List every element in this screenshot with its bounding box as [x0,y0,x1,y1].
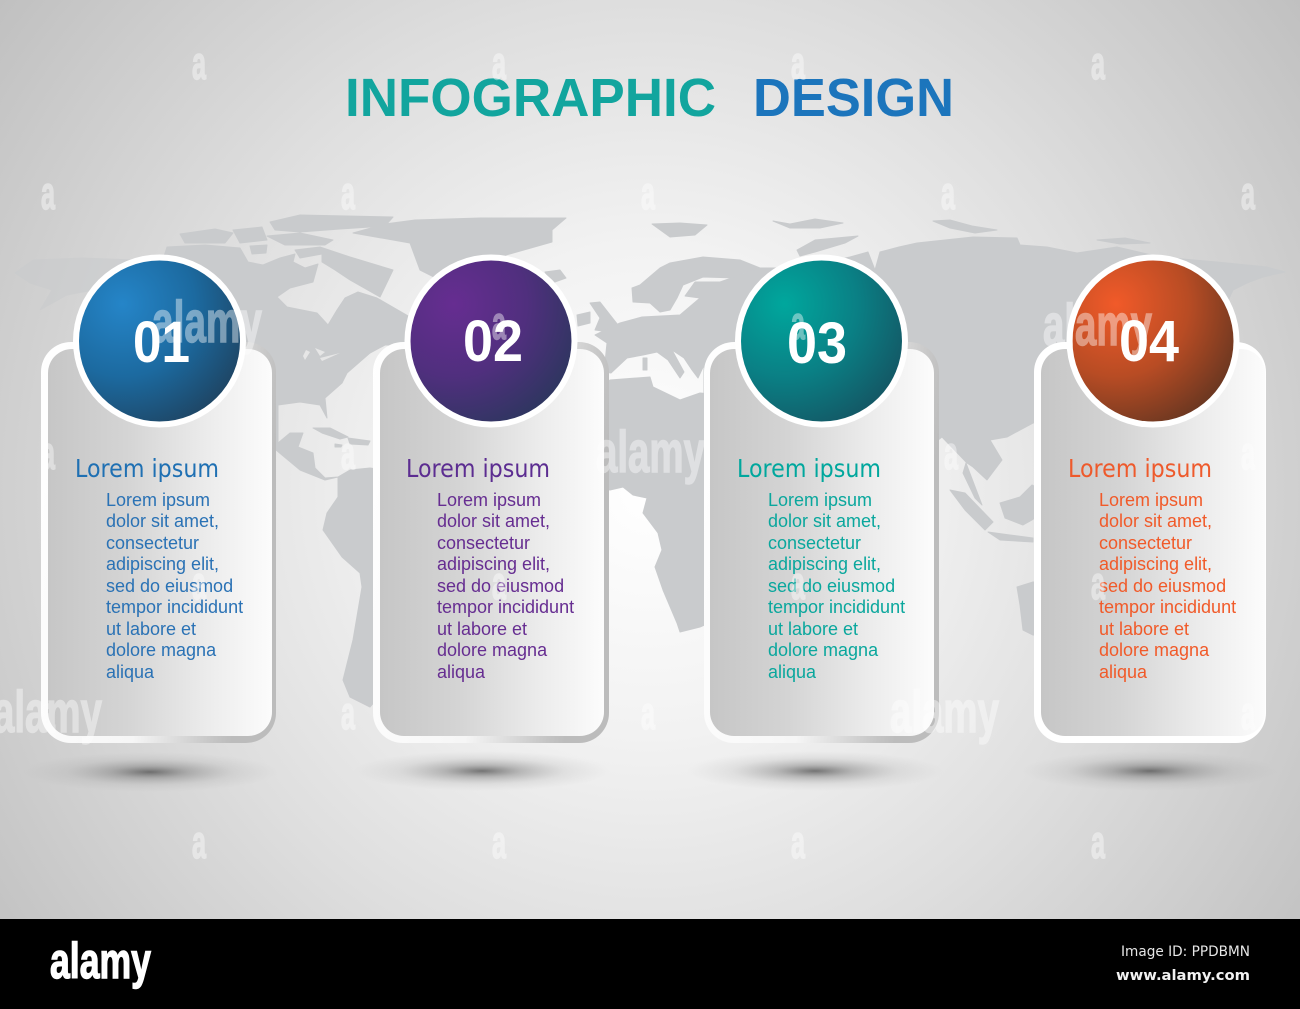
watermark: a [1091,816,1105,868]
body text 03: consectetur [768,533,861,553]
panel: step 04 [1034,254,1266,743]
image id: Image ID: PPDBMN [1121,944,1250,960]
watermark: a [492,297,506,349]
title: DESIGN [753,68,954,128]
watermark: a [41,167,55,219]
watermark: a [791,557,805,609]
watermark: a [791,297,805,349]
title [345,68,954,128]
body text 02: dolor sit amet, [437,511,550,531]
watermark: a [641,687,655,739]
body text 03: adipiscing elit, [768,554,881,574]
body text 01: dolor sit amet, [106,511,219,531]
body text 02: sed do eiusmod [437,576,564,596]
watermark: a [1241,427,1255,479]
panel: step 01 [41,254,276,743]
body text 02: dolore magna [437,640,548,660]
body text 03: sed do eiusmod [768,576,895,596]
body text 03: aliqua [768,662,817,682]
body text 04: aliqua [1099,662,1148,682]
watermark: a [941,167,955,219]
body text 04: Lorem ipsum [1099,490,1203,510]
watermark: alamy [596,420,705,485]
watermark: a [192,37,206,89]
body text 02: Lorem ipsum [437,490,541,510]
body text 04: tempor incididunt [1099,597,1236,617]
watermark: alamy [890,680,999,745]
watermark: a [341,427,355,479]
body text 01: ut labore et [106,619,196,639]
panel: step 03 [704,254,939,743]
body text 03: tempor incididunt [768,597,905,617]
body text 04: dolor sit amet, [1099,511,1212,531]
watermark: a [1091,37,1105,89]
watermark: a [492,816,506,868]
body text 04: sed do eiusmod [1099,576,1226,596]
body text 01: consectetur [106,533,199,553]
watermark: a [791,816,805,868]
title: INFOGRAPHIC [345,68,716,128]
body text 01: dolore magna [106,640,217,660]
circle badge 01: 01 [133,310,190,375]
footer logo: alamy [50,933,151,989]
watermark: a [192,557,206,609]
body text 03: ut labore et [768,619,858,639]
website: www.alamy.com [1116,968,1250,984]
body text 04: ut labore et [1099,619,1189,639]
watermark: a [341,687,355,739]
world map [15,215,1285,707]
watermark: a [1091,557,1105,609]
body text 02: consectetur [437,533,530,553]
circle badge 04 [1066,254,1240,428]
body text 01: aliqua [106,662,155,682]
watermark: a [1241,167,1255,219]
body text 04: dolore magna [1099,640,1210,660]
circle badge 03: 03 [787,311,847,376]
heading 03: Lorem ipsum [737,454,881,483]
body text 03: dolore magna [768,640,879,660]
card shadows [22,751,1278,792]
heading 02: Lorem ipsum [406,454,550,483]
body text 01: tempor incididunt [106,597,243,617]
body text 01: sed do eiusmod [106,576,233,596]
body text 03: dolor sit amet, [768,511,881,531]
watermark: a [791,37,805,89]
body text 03: Lorem ipsum [768,490,872,510]
watermark: alamy [1043,293,1152,358]
watermark: alamy [152,290,262,355]
body text 04: adipiscing elit, [1099,554,1212,574]
body text 01: Lorem ipsum [106,490,210,510]
body text 04: consectetur [1099,533,1192,553]
circle badge 01 [73,254,246,428]
body text 02: adipiscing elit, [437,554,550,574]
watermark [0,37,1255,868]
body text 02: ut labore et [437,619,527,639]
body text 02: aliqua [437,662,486,682]
body text 02: tempor incididunt [437,597,574,617]
watermark: a [492,37,506,89]
watermark: a [641,167,655,219]
watermark: a [41,427,55,479]
heading 04: Lorem ipsum [1068,454,1212,483]
circle badge 03 [735,254,908,428]
watermark: a [1241,687,1255,739]
footer bar [0,919,1300,1009]
watermark: a [41,687,55,739]
panel: step 02 [373,254,609,743]
circle badge 04: 04 [1119,309,1179,374]
watermark: a [492,557,506,609]
watermark: a [944,427,958,479]
watermark: a [192,816,206,868]
heading 01: Lorem ipsum [75,454,219,483]
circle badge 02 [404,254,578,428]
body text 01: adipiscing elit, [106,554,219,574]
circle badge 02: 02 [463,309,523,374]
watermark: a [341,167,355,219]
